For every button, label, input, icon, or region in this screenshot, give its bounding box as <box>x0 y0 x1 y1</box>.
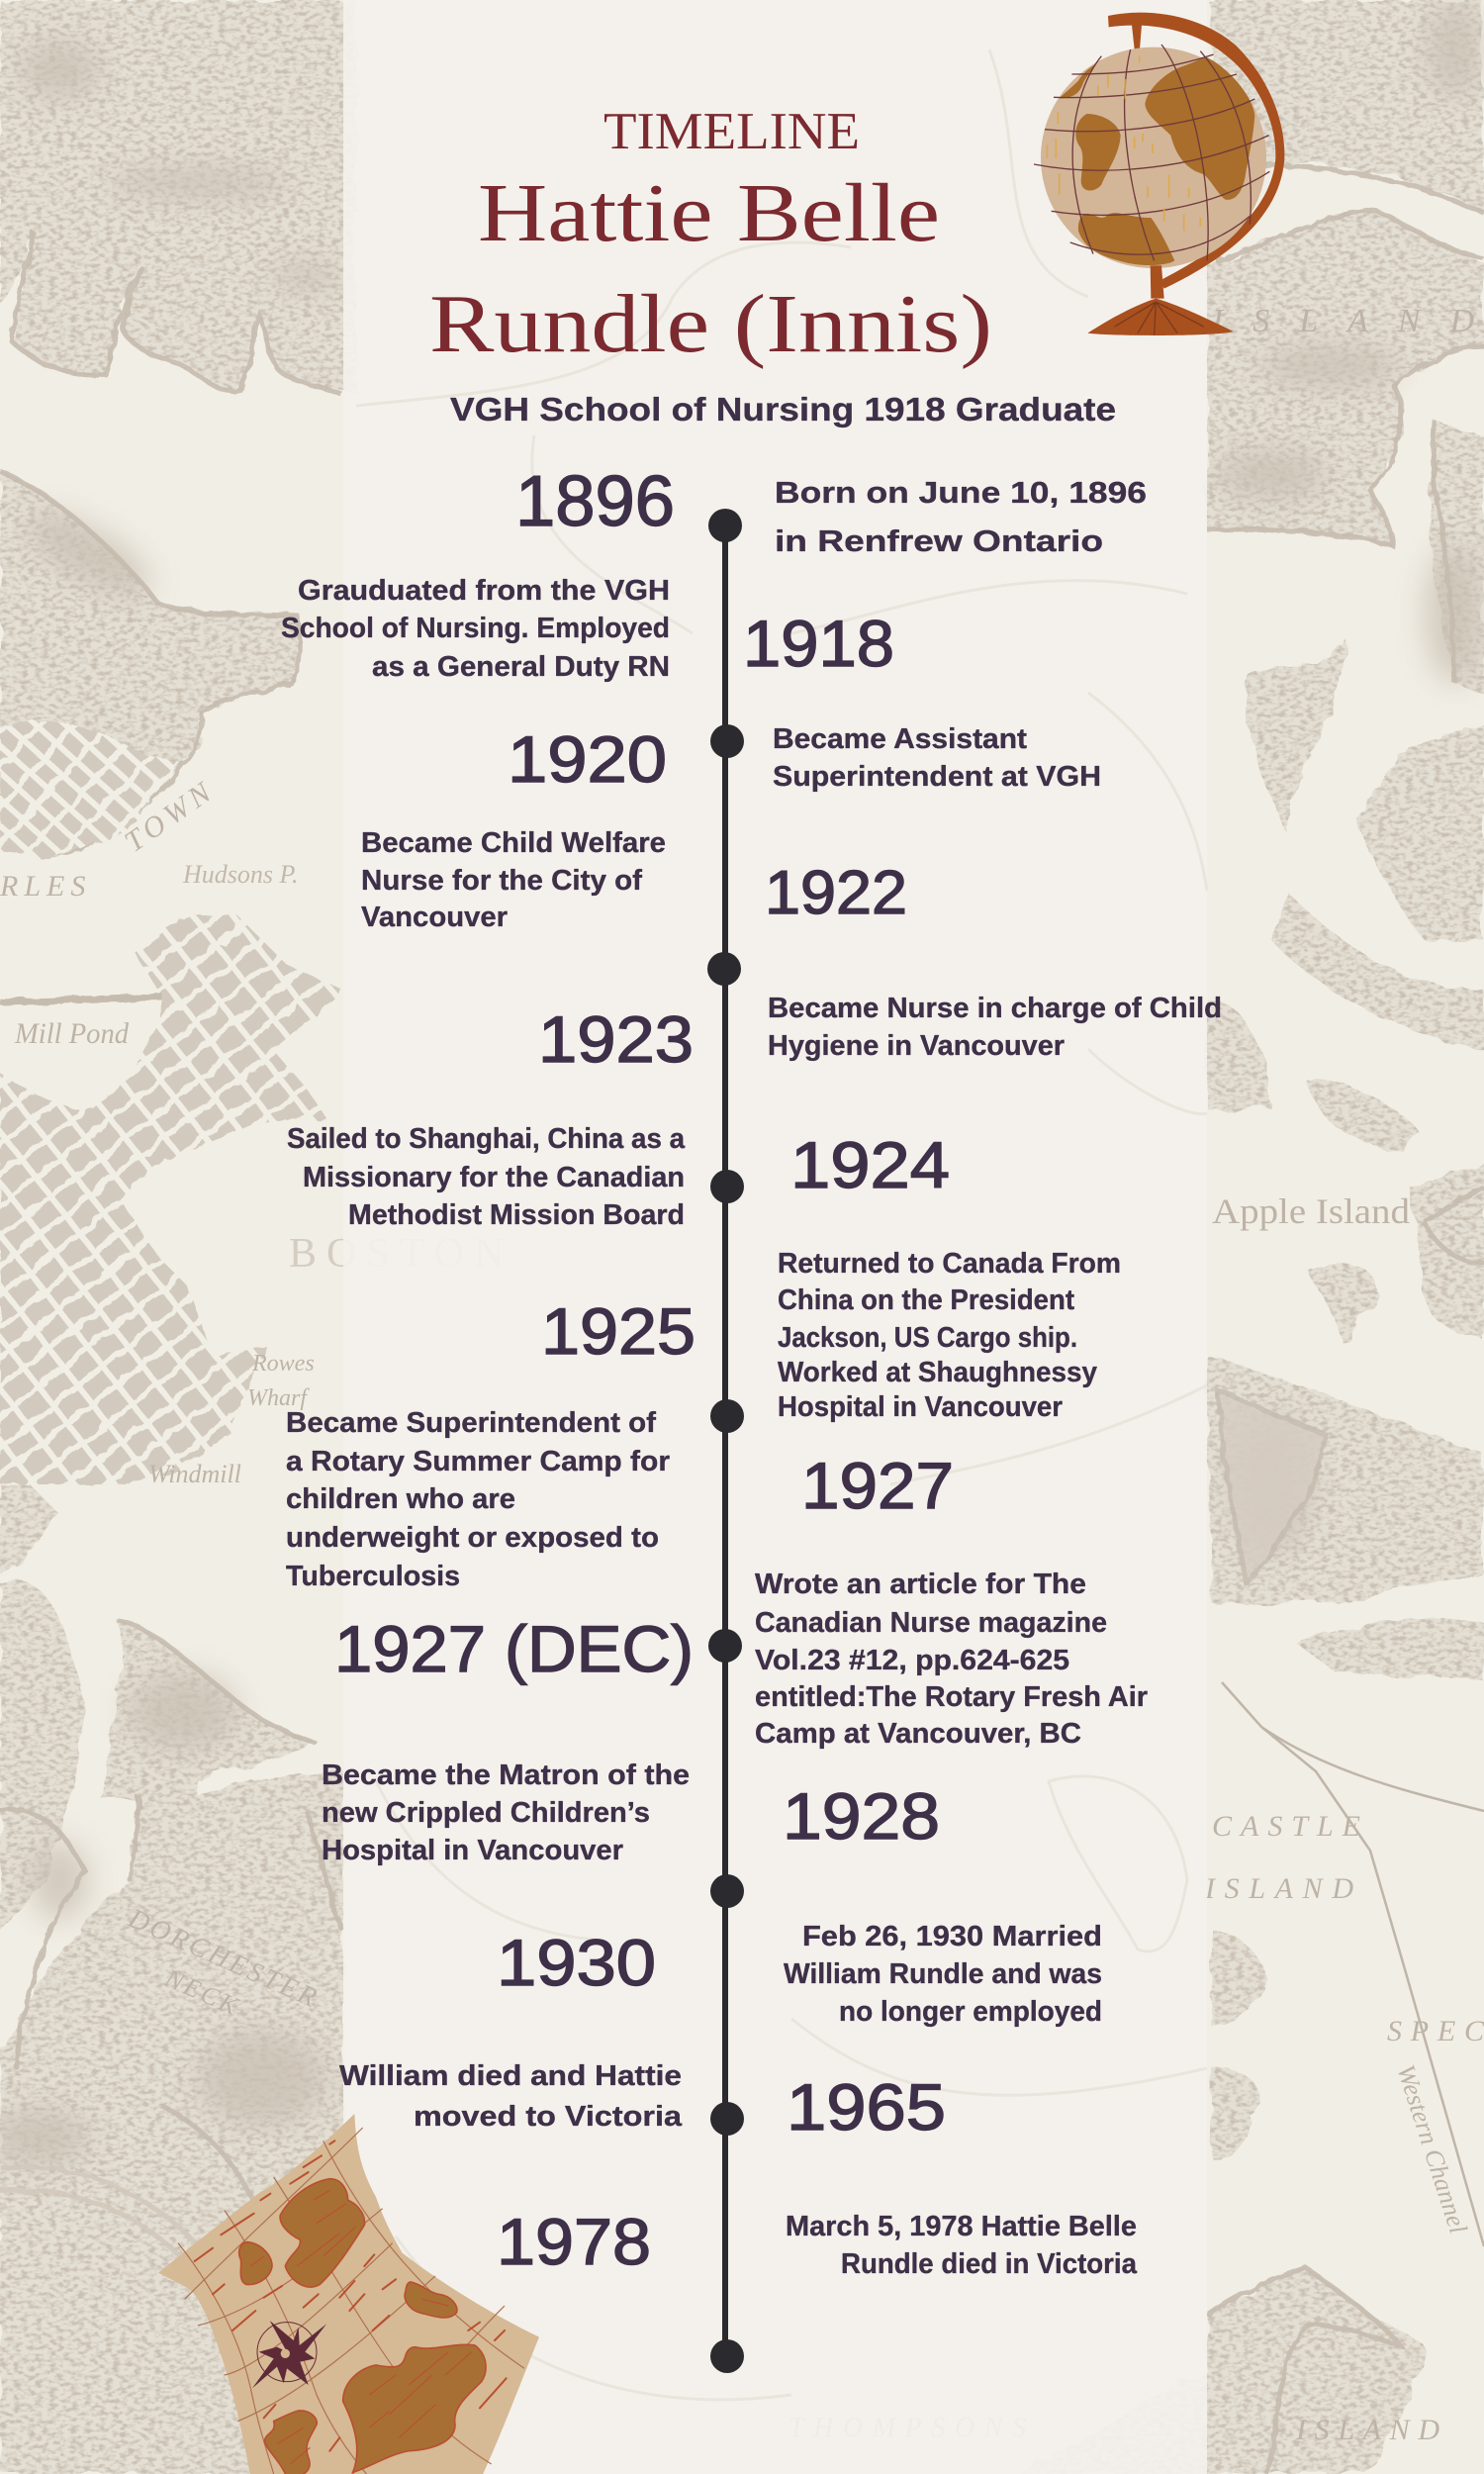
globe grid lines <box>1034 45 1269 260</box>
map place names: BOSTON <box>289 1231 513 1277</box>
map place names: Apple Island <box>1212 1191 1410 1231</box>
entry 1922 <box>361 827 907 933</box>
description 1927 December: Vol.23 #12, pp.624-625 <box>755 1645 1069 1676</box>
description 1978: Rundle died in Victoria <box>841 2248 1138 2280</box>
year 1930: 1930 <box>497 1926 656 1999</box>
description 1927: underweight or exposed to <box>286 1522 659 1554</box>
description 1928: Became the Matron of the <box>322 1760 690 1791</box>
map place names: ISLAND <box>1211 303 1474 339</box>
city street grids <box>0 720 341 1484</box>
description 1920: Superintendent at VGH <box>773 761 1101 793</box>
entry 1925 <box>541 1248 1121 1423</box>
compass rose <box>252 2321 326 2388</box>
description 1927 December: entitled:The Rotary Fresh Air <box>755 1681 1148 1713</box>
description 1927: a Rotary Summer Camp for <box>286 1446 670 1477</box>
map place names: NECK <box>160 1963 244 2022</box>
map place names: Windmill <box>148 1460 241 1488</box>
entry 1927 December <box>334 1569 1148 1750</box>
description 1925 <box>778 1248 1121 1423</box>
map place names: Hudsons P. <box>182 860 299 889</box>
map place names: Wharf <box>247 1385 310 1411</box>
description 1922 <box>361 827 666 933</box>
description 1927 December: Canadian Nurse magazine <box>755 1607 1107 1639</box>
entry 1924 <box>287 1123 950 1231</box>
description 1925: China on the President <box>778 1285 1074 1316</box>
year 1927: 1927 <box>801 1449 954 1522</box>
description 1922: Nurse for the City of <box>361 865 642 897</box>
description 1928: new Crippled Children’s <box>322 1797 650 1829</box>
icon: globe on stand <box>1034 13 1284 335</box>
description 1918: Grauduated from the VGH <box>298 575 670 607</box>
entry 1978 <box>497 2205 1138 2280</box>
description 1896: Born on June 10, 1896 <box>775 475 1147 510</box>
year 1925: 1925 <box>541 1294 696 1368</box>
title: timeline label: TIMELINE <box>603 103 860 160</box>
year 1918: 1918 <box>743 607 894 680</box>
center light panel <box>343 0 1207 2474</box>
entry 1918 <box>281 575 894 683</box>
description 1922: Became Child Welfare <box>361 827 666 859</box>
title block <box>429 103 992 370</box>
map place names: ISLAND <box>1204 1872 1353 1905</box>
description 1918 <box>281 575 670 683</box>
description 1927: Became Superintendent of <box>286 1407 656 1439</box>
map place names: TOWN <box>119 774 221 859</box>
description 1924 <box>287 1123 686 1231</box>
year 1965: 1965 <box>787 2070 946 2143</box>
entry 1928 <box>322 1760 940 1866</box>
description 1925: Hospital in Vancouver <box>778 1391 1063 1423</box>
entry 1896 <box>515 462 1147 558</box>
entry 1927 <box>286 1407 954 1592</box>
year 1928: 1928 <box>783 1779 940 1853</box>
description 1927: children who are <box>286 1483 515 1515</box>
entry 1965 <box>339 2060 946 2143</box>
map place names: Western Channel <box>1391 2061 1473 2237</box>
description 1978: March 5, 1978 Hattie Belle <box>786 2211 1137 2242</box>
description 1927: Tuberculosis <box>286 1561 460 1592</box>
globe stem and base <box>1151 265 1164 299</box>
description 1965 <box>339 2060 683 2133</box>
description 1927 December: Wrote an article for The <box>755 1569 1086 1600</box>
description 1918: School of Nursing. Employed <box>281 613 670 644</box>
year 1923: 1923 <box>538 1002 694 1076</box>
year 1927 (DEC): 1927 (DEC) <box>334 1612 694 1685</box>
year 1920: 1920 <box>508 722 667 796</box>
description 1930: William Rundle and was <box>784 1958 1102 1990</box>
description 1924: Sailed to Shanghai, China as a <box>287 1123 686 1155</box>
description 1925: Worked at Shaughnessy <box>778 1357 1097 1388</box>
map place names: THOMPSONS <box>788 2413 1026 2443</box>
description 1925: Returned to Canada From <box>778 1248 1121 1280</box>
map place names: Mill Pond <box>14 1017 130 1050</box>
map place names: CASTLE <box>1212 1810 1360 1843</box>
description 1965: moved to Victoria <box>414 2101 683 2133</box>
globe highlights <box>1047 56 1200 231</box>
description 1896 <box>775 475 1147 558</box>
description 1922: Vancouver <box>361 902 508 933</box>
description 1920 <box>773 723 1101 793</box>
entry 1930 <box>497 1921 1102 2028</box>
globe arm <box>1108 13 1284 289</box>
map place names: DORCHESTER <box>123 1903 324 2015</box>
map place names: ISLAND <box>1295 2414 1439 2446</box>
description 1930: no longer employed <box>839 1996 1102 2028</box>
title: name line two: Rundle (Innis) <box>429 278 992 370</box>
description 1925: Jackson, US Cargo ship. <box>778 1322 1077 1354</box>
continent hatch marks <box>250 2190 472 2464</box>
description 1918: as a General Duty RN <box>372 651 670 683</box>
description 1927 December: Camp at Vancouver, BC <box>755 1718 1081 1750</box>
entry 1920 <box>508 722 1101 796</box>
globe continents <box>1060 56 1254 265</box>
map continents <box>239 2179 486 2474</box>
description 1965: William died and Hattie <box>339 2060 682 2092</box>
description 1920: Became Assistant <box>773 723 1027 755</box>
map grid lines <box>178 2128 524 2474</box>
description 1928: Hospital in Vancouver <box>322 1835 623 1866</box>
description 1930: Feb 26, 1930 Married <box>802 1921 1102 1952</box>
description 1923: Hygiene in Vancouver <box>768 1030 1065 1062</box>
description 1924: Methodist Mission Board <box>348 1199 685 1231</box>
description 1896: in Renfrew Ontario <box>775 523 1103 558</box>
description 1927 <box>286 1407 670 1592</box>
map dashes <box>195 2141 507 2451</box>
year 1922: 1922 <box>765 859 907 927</box>
offshore lines <box>1222 1682 1484 2246</box>
year 1978: 1978 <box>497 2205 651 2278</box>
year 1896: 1896 <box>515 462 675 541</box>
map place names: Rowes <box>251 1351 315 1377</box>
globe top pin <box>1132 25 1142 49</box>
description 1978 <box>786 2211 1138 2280</box>
globe sphere <box>1041 48 1266 268</box>
year 1924: 1924 <box>790 1128 950 1201</box>
map place names: RLES <box>0 870 91 903</box>
description 1923: Became Nurse in charge of Child <box>768 993 1222 1024</box>
description 1928 <box>322 1760 690 1866</box>
description 1923 <box>768 993 1222 1062</box>
description 1927 December <box>755 1569 1148 1750</box>
faint map outlines on panel <box>356 49 1207 2400</box>
title: name line one: Hattie Belle <box>478 167 940 259</box>
icon: treasure map with compass <box>158 2114 539 2474</box>
description 1930 <box>784 1921 1102 2028</box>
entry 1923 <box>538 993 1222 1076</box>
subtitle: VGH School of Nursing 1918 Graduate <box>450 391 1116 428</box>
description 1924: Missionary for the Canadian <box>303 1162 685 1193</box>
map place names: SPEC <box>1387 2015 1484 2047</box>
timeline vertical line with dots <box>707 509 744 2373</box>
map sheet <box>158 2114 539 2474</box>
